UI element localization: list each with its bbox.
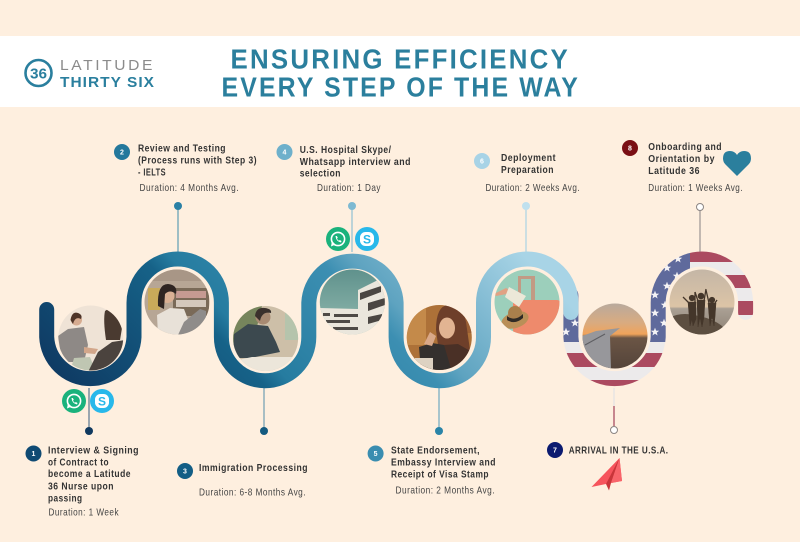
step 1 text block: become a Latitude [48, 468, 131, 480]
badge 3: 3 [183, 468, 187, 476]
photo 2: woman at laptop [144, 269, 210, 335]
step 8 text block: Orientation by [648, 153, 715, 165]
step 5 text block: Duration: 2 Months Avg. [396, 485, 495, 497]
step 6 text block: Deployment [501, 152, 556, 164]
badge 7: 7 [553, 448, 557, 454]
step 1 text block [26, 444, 139, 518]
step 1 text block: Interview & Signing [48, 444, 139, 456]
logo: Latitude Thirty Six: LATITUDE [60, 57, 155, 74]
header band [0, 36, 800, 107]
badge 5: 5 [374, 451, 378, 458]
badge 6: 6 [480, 158, 484, 166]
step 5 text block: Receipt of Visa Stamp [391, 468, 489, 480]
title [222, 44, 580, 102]
badge 4: 4 [283, 150, 287, 156]
logo: Latitude Thirty Six: 36 [30, 66, 47, 82]
step 8 text block: Duration: 1 Weeks Avg. [648, 182, 743, 194]
step 4 text block: selection [300, 168, 341, 180]
icon: red paper plane [592, 458, 622, 490]
step 2 text block: Duration: 4 Months Avg. [140, 182, 239, 194]
step 6 text block [474, 152, 580, 194]
icon: WhatsApp [326, 227, 350, 251]
step 1 text block: Duration: 1 Week [48, 506, 119, 518]
icon: WhatsApp [62, 389, 86, 413]
badge 2 [114, 144, 130, 160]
step 4 text block [276, 144, 411, 194]
photo 7: airplane wing at sunset [582, 303, 648, 369]
step 4 text block: Duration: 1 Day [317, 182, 381, 194]
photo 1: contract handshake [58, 305, 125, 372]
step 5 text block: Embassy Interview and [391, 456, 496, 468]
step 7 text block: ARRIVAL IN THE U.S.A. [569, 444, 668, 456]
step 4 text block: U.S. Hospital Skype/ [300, 144, 392, 156]
logo: Latitude Thirty Six [26, 57, 155, 91]
icon: Skype: S [363, 232, 371, 246]
badge 8: 8 [628, 146, 632, 152]
logo: Latitude Thirty Six: THIRTY SIX [60, 74, 155, 91]
step 2 text block [114, 143, 257, 194]
title: EVERY STEP OF THE WAY [222, 72, 580, 102]
gradient ribbon timeline [47, 259, 571, 381]
step 5 text block [368, 444, 496, 497]
step 8 text block: Latitude 36 [648, 165, 700, 177]
photo 8: group silhouette by the sea [669, 269, 735, 336]
step 4 text block: Whatsapp interview and [300, 156, 411, 168]
step 2 text block: - IELTS [138, 167, 166, 179]
title: ENSURING EFFICIENCY [230, 44, 570, 74]
photo 5: smiling woman on phone [406, 305, 473, 372]
step 2 text block: (Process runs with Step 3) [138, 155, 257, 167]
connector stems and end dots [85, 202, 704, 435]
step 8 text block: Onboarding and [648, 141, 722, 153]
photo 4: hospital building [319, 269, 386, 336]
step 3 text block: Immigration Processing [199, 462, 308, 474]
step 6 text block: Preparation [501, 164, 554, 176]
step 2 text block: Review and Testing [138, 143, 226, 155]
icon: Skype: S [98, 394, 106, 408]
badge 1: 1 [32, 451, 36, 458]
flag ribbon segment [563, 252, 754, 386]
step 1 text block: passing [48, 492, 82, 504]
step 1 text block: 36 Nurse upon [48, 480, 114, 492]
icons: WhatsApp and Skype (top) [326, 227, 379, 251]
step 3 text block [177, 462, 308, 499]
step 3 text block: Duration: 6-8 Months Avg. [199, 487, 306, 499]
badge 2: 2 [120, 150, 124, 156]
step 7 text block [547, 442, 668, 458]
photo 3: man at desk [233, 306, 299, 372]
step 8 text block [622, 140, 743, 194]
icons: WhatsApp and Skype (bottom) [62, 389, 114, 413]
step 1 text block: of Contract to [48, 456, 109, 468]
photo 6: travel luggage and hat [494, 269, 561, 336]
step 6 text block: Duration: 2 Weeks Avg. [486, 182, 580, 194]
step 5 text block: State Endorsement, [391, 444, 480, 456]
icon: heart [723, 151, 751, 176]
